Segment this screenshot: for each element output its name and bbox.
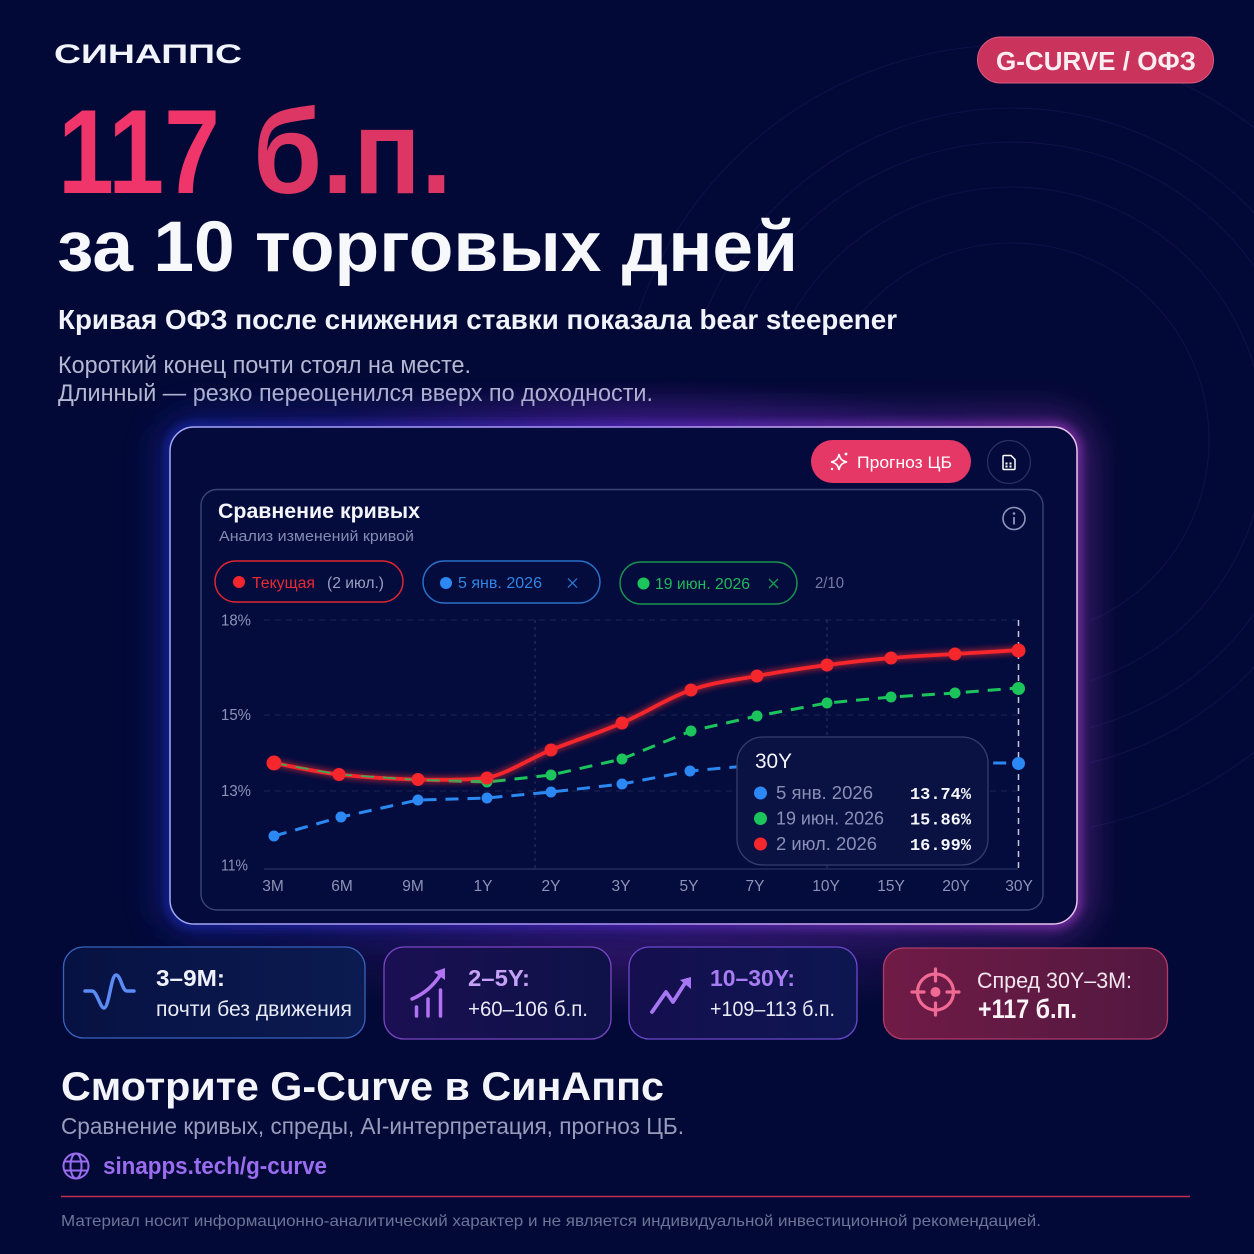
tooltip: 30Y values: 30Y — [755, 750, 792, 773]
y axis labels: 15% — [221, 707, 251, 724]
tooltip: 30Y values: 19 июн. 2026 — [776, 808, 884, 828]
panel title: Сравнение кривых — [218, 500, 420, 523]
series: 5 Jan 2026 — [268, 757, 1025, 842]
tooltip: 30Y values: 5 янв. 2026 — [776, 783, 873, 803]
y axis labels: 13% — [221, 783, 251, 800]
legend chip: 5 Jan 2026 — [423, 561, 600, 603]
legend chip: current: (2 июл.) — [327, 575, 384, 592]
link with globe icon: sinapps.tech/g-curve — [103, 1153, 327, 1180]
stat card: spread — [884, 948, 1168, 1039]
call to action heading: Смотрите G-Curve в СинАппс — [61, 1065, 664, 1109]
x axis labels: 3Y — [612, 878, 630, 895]
panel: dashboard card — [170, 427, 1077, 924]
stat card: 3-9M: почти без движения — [156, 998, 352, 1021]
call to action text: Сравнение кривых, спреды, AI-интерпретация, прогноз ЦБ. — [61, 1113, 684, 1139]
disclaimer: Материал носит информационно-аналитический характер и не является индивидуальной инвестиционной рекомендацией. — [61, 1213, 1041, 1230]
stat card: 10-30Y: +109–113 б.п. — [710, 998, 835, 1021]
icon: zigzag arrow — [652, 977, 691, 1012]
legend chip: 19 Jun 2026: 19 июн. 2026 — [655, 576, 750, 593]
stat card: spread: Спред 30Y–3M: — [977, 968, 1132, 993]
legend chip: 19 Jun 2026 — [620, 562, 797, 604]
icon: pulse — [85, 975, 134, 1008]
x axis labels: 15Y — [877, 878, 905, 895]
stat card: 3-9M — [64, 947, 365, 1038]
hero number: 117 — [58, 85, 220, 219]
button: document icon — [988, 440, 1030, 484]
x axis labels: 6M — [331, 878, 353, 895]
x axis labels — [262, 878, 1033, 895]
stat card: 10-30Y — [629, 947, 857, 1039]
tooltip: 30Y values: 15.86% — [910, 810, 971, 830]
tooltip: 30Y values: 2 июл. 2026 — [776, 834, 877, 854]
icon: target — [912, 969, 959, 1015]
y axis labels: 11% — [221, 858, 248, 874]
stat card: 10-30Y: 10–30Y: — [710, 965, 795, 991]
tooltip: 30Y values — [737, 737, 988, 865]
hero number — [58, 85, 452, 219]
legend chip: current: Текущая — [252, 575, 315, 592]
panel: curve comparison — [201, 490, 1043, 910]
description — [58, 352, 653, 407]
legend chip: 5 Jan 2026: 5 янв. 2026 — [458, 575, 542, 592]
logo: СИНАППС — [54, 39, 242, 69]
x axis labels: 5Y — [680, 878, 698, 895]
tooltip: 30Y values: 16.99% — [910, 836, 971, 855]
button: Прогноз ЦБ: Прогноз ЦБ — [857, 453, 952, 472]
x axis labels: 2Y — [542, 878, 560, 895]
badge: G-CURVE / ОФЗ — [978, 37, 1214, 83]
subheading: Кривая ОФЗ после снижения ставки показала bear steepener — [58, 304, 897, 335]
badge: G-CURVE / ОФЗ: G-CURVE / ОФЗ — [996, 48, 1196, 76]
x axis labels: 7Y — [746, 878, 764, 895]
stat card: 3-9M: 3–9М: — [156, 965, 225, 991]
panel subtitle: Анализ изменений кривой — [219, 528, 414, 545]
legend chip: current — [215, 561, 403, 602]
button: Прогноз ЦБ — [811, 440, 971, 483]
stat card: spread: +117 б.п. — [978, 994, 1077, 1024]
description: Короткий конец почти стоял на месте. — [58, 352, 471, 379]
x axis labels: 3M — [262, 878, 284, 895]
headline: за 10 торговых дней — [57, 208, 798, 287]
x axis labels: 9M — [402, 878, 424, 895]
x axis labels: 10Y — [812, 878, 840, 895]
stat card: 2-5Y: 2–5Y: — [468, 965, 530, 991]
x axis labels: 1Y — [474, 878, 492, 895]
stat card: 2-5Y — [384, 947, 611, 1039]
x axis labels: 30Y — [1005, 878, 1033, 895]
y axis labels: 18% — [221, 612, 251, 630]
description: Длинный — резко переоценился вверх по доходности. — [58, 380, 653, 407]
counter: 2/10 — [815, 575, 844, 592]
x axis labels: 20Y — [942, 878, 970, 895]
series: 2 Jul 2026 — [266, 644, 1026, 786]
stat card: 2-5Y: +60–106 б.п. — [468, 998, 588, 1021]
icon: rising bars — [412, 968, 445, 1016]
tooltip: 30Y values: 13.74% — [910, 785, 971, 804]
series: 19 Jun 2026 — [274, 682, 1025, 788]
line chart — [221, 612, 1033, 895]
hero number: б.п. — [253, 85, 452, 219]
icon: info — [1003, 508, 1025, 530]
y axis labels — [221, 612, 251, 874]
